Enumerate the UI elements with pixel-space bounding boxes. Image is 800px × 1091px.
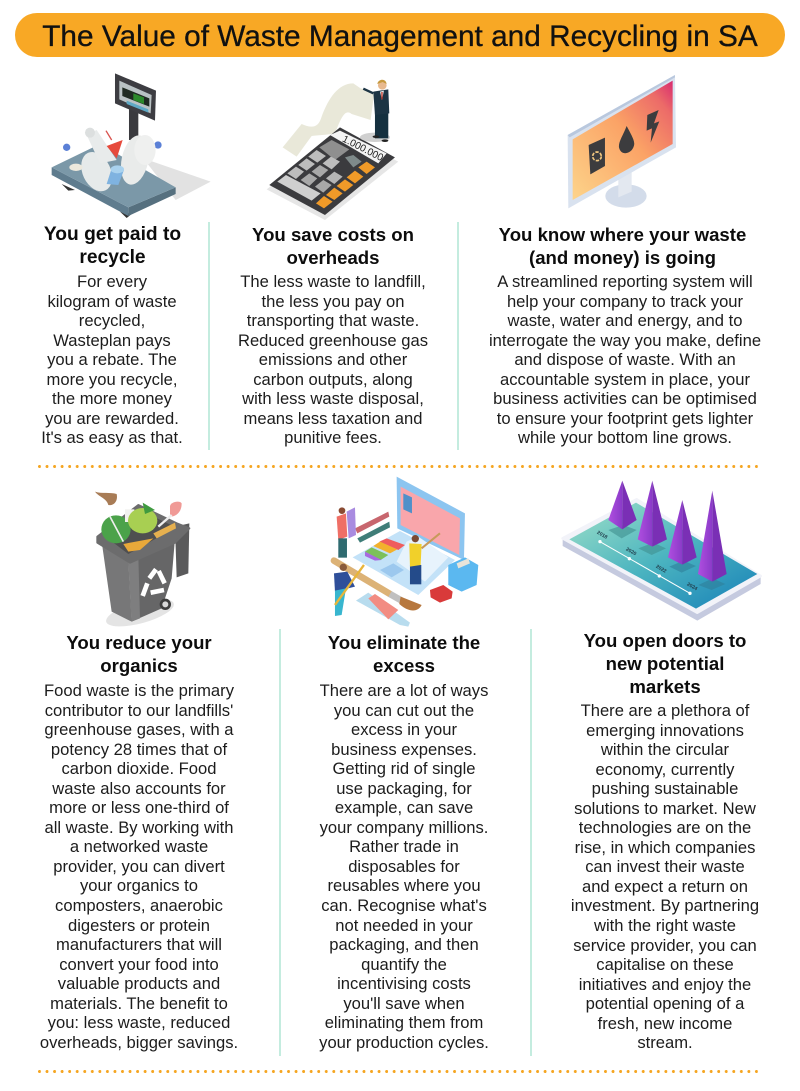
body text: more or less one-third of (49, 798, 229, 817)
body text: manufacturers that will (56, 935, 222, 954)
body text: It's as easy as that. (41, 428, 183, 447)
body text: waste also accounts for (52, 779, 226, 798)
body text: service provider, you can (573, 936, 757, 955)
body text: reusables where you (327, 876, 481, 895)
body text: help your company to track your (507, 292, 743, 311)
body text: eliminating them from (325, 1013, 483, 1032)
heading: recycle (79, 247, 146, 268)
panel: you get paid to recycle (41, 224, 183, 447)
body text: technologies are on the (579, 818, 751, 837)
body text: while your bottom line grows. (518, 428, 732, 447)
body text: the less you pay on (262, 292, 404, 311)
body text: valuable products and (58, 974, 220, 993)
icon: calculator with paper roll and businessman (267, 80, 398, 220)
body text: to ensure your footprint gets lighter (497, 409, 753, 428)
body text: stream. (637, 1033, 693, 1052)
body text (41, 272, 183, 447)
icon: smartphone with purple pyramid chart: 2024 (686, 582, 698, 592)
icon: smartphone with purple pyramid chart: 2020 (625, 547, 637, 557)
icon: smartphone with purple pyramid chart (563, 481, 761, 621)
body text: capitalise on these (596, 955, 734, 974)
heading: excess (373, 655, 435, 676)
body text: you'll save when (343, 994, 465, 1013)
heading: You save costs on (252, 224, 414, 245)
body text: business activities can be optimised (493, 389, 757, 408)
body text: potential opening of a (586, 994, 744, 1013)
body text: greenhouse gases, with a (44, 720, 234, 739)
body text: within the circular (601, 740, 729, 759)
body text: There are a lot of ways (320, 681, 488, 700)
body text: kilogram of waste (47, 292, 177, 311)
body text: overheads, bigger savings. (40, 1033, 238, 1052)
heading: organics (100, 655, 178, 676)
body text: you: less waste, reduced (48, 1013, 230, 1032)
icon: smartphone with purple pyramid chart: 2022 (655, 564, 667, 575)
heading: You know where your waste (499, 224, 746, 245)
heading: markets (629, 676, 701, 697)
heading: overheads (286, 247, 380, 268)
body text: with the right waste (594, 916, 736, 935)
body text: emerging innovations (586, 721, 744, 740)
icon: calculator with paper roll and businessman: 1.000.000 (340, 134, 385, 164)
title banner (15, 13, 785, 57)
icon: smartphone with purple pyramid chart: 2018 (596, 530, 608, 541)
body text: A streamlined reporting system will (497, 272, 753, 291)
heading (328, 632, 480, 676)
body text: accountable system in place, your (500, 370, 750, 389)
icon: weighing scale with plastic waste (52, 73, 211, 218)
body text: digesters or protein (68, 916, 210, 935)
panel: you open doors to new potential markets (571, 630, 759, 1052)
body text: more you recycle, (47, 370, 177, 389)
body text: economy, currently (596, 760, 734, 779)
heading (252, 224, 414, 268)
body text: rise, in which companies (575, 838, 755, 857)
body text: transporting that waste. (247, 311, 419, 330)
body text: potency 28 times that of (51, 740, 227, 759)
body text: Food waste is the primary (44, 681, 234, 700)
heading (66, 632, 212, 676)
icon: recycling bin full of organic waste (95, 492, 189, 632)
title banner: The Value of Waste Management and Recycling in SA (42, 20, 758, 53)
body text: your company millions. (320, 818, 488, 837)
body text: Getting rid of single (333, 759, 475, 778)
body text: The less waste to landfill, (240, 272, 426, 291)
panel: you eliminate the excess (319, 632, 489, 1052)
body text: carbon dioxide. Food (62, 759, 216, 778)
body text: incentivising costs (337, 974, 471, 993)
body text: provider, you can divert (53, 857, 225, 876)
body text: recycled, (79, 311, 145, 330)
body text: means less taxation and (244, 409, 422, 428)
body text: emissions and other (259, 350, 407, 369)
body text: your organics to (80, 876, 198, 895)
panel: you save costs on overheads (238, 224, 428, 447)
body text: contributor to our landfills' (45, 701, 233, 720)
body text: and expect a return on (582, 877, 748, 896)
body text: disposables for (348, 857, 460, 876)
icon: laptop with designers and art supplies (334, 477, 478, 627)
body text: with less waste disposal, (242, 389, 424, 408)
body text: your production cycles. (319, 1033, 489, 1052)
body text: pushing sustainable (592, 779, 738, 798)
body text (238, 272, 428, 447)
body text: you are rewarded. (45, 409, 179, 428)
body text: you a rebate. The (47, 350, 177, 369)
body text: all waste. By working with (44, 818, 234, 837)
body text: materials. The benefit to (50, 994, 228, 1013)
body text: not needed in your (335, 916, 473, 935)
heading: (and money) is going (529, 247, 716, 268)
body text: punitive fees. (284, 428, 382, 447)
body text (40, 681, 238, 1052)
heading: You open doors to (584, 630, 746, 651)
body text: can. Recognise what's (321, 896, 487, 915)
body text: packaging, and then (329, 935, 479, 954)
body text: example, can save (335, 798, 473, 817)
panel: you reduce your organics (40, 632, 238, 1052)
heading (499, 224, 746, 268)
heading (584, 630, 746, 697)
body text: a networked waste (70, 837, 208, 856)
body text: use packaging, for (336, 779, 472, 798)
body text: composters, anaerobic (55, 896, 223, 915)
body text: interrogate the way you make, define (489, 331, 761, 350)
heading: new potential (606, 653, 724, 674)
body text: can invest their waste (585, 857, 745, 876)
body text (571, 701, 759, 1052)
heading (44, 224, 181, 268)
body text (319, 681, 489, 1052)
body text: Rather trade in (349, 837, 459, 856)
body text: investment. By partnering (571, 896, 759, 915)
icon: computer monitor with waste, water and energy symbols (568, 75, 676, 208)
body text: the more money (52, 389, 172, 408)
heading: You reduce your (66, 632, 212, 653)
body text: solutions to market. New (574, 799, 756, 818)
heading: You get paid to (44, 224, 181, 245)
body text: Reduced greenhouse gas (238, 331, 428, 350)
body text: and dispose of waste. With an (514, 350, 736, 369)
panel: you know where your waste is going (489, 224, 761, 447)
body text: business expenses. (331, 740, 477, 759)
body text: initiatives and enjoy the (579, 975, 751, 994)
body text: waste, water and energy, and to (508, 311, 742, 330)
body text (489, 272, 761, 447)
body text: carbon outputs, along (253, 370, 413, 389)
body text: There are a plethora of (581, 701, 749, 720)
body text: For every (77, 272, 147, 291)
body text: convert your food into (59, 955, 219, 974)
body text: quantify the (361, 955, 447, 974)
heading: You eliminate the (328, 632, 480, 653)
body text: you can cut out the (334, 701, 474, 720)
body text: excess in your (351, 720, 457, 739)
body text: Wasteplan pays (53, 331, 171, 350)
body text: fresh, new income (598, 1014, 732, 1033)
